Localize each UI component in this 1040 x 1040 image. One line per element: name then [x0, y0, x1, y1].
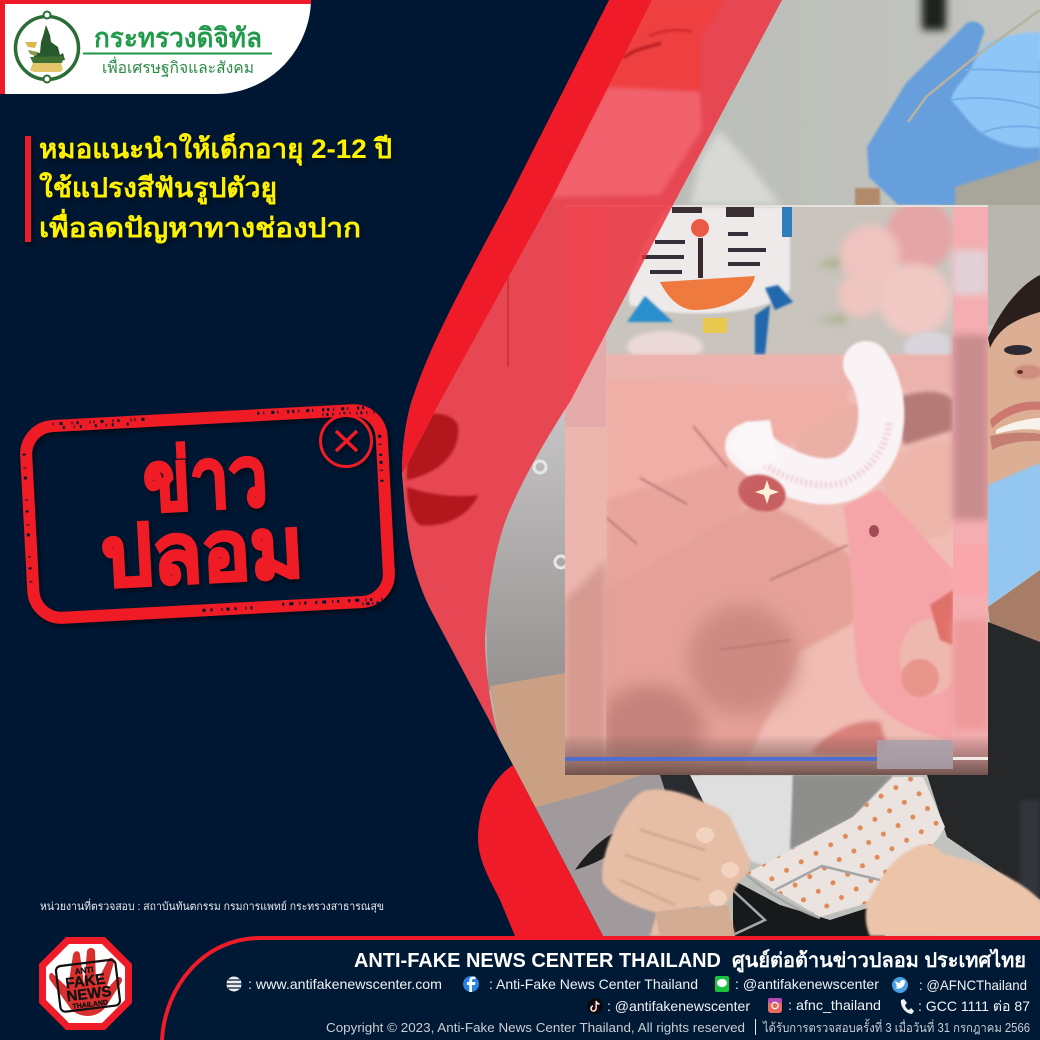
tinted forehead	[608, 0, 724, 90]
icon: ministry emblem	[16, 12, 78, 82]
stamp text: ข่าว	[141, 429, 270, 529]
icon: twitter	[892, 977, 908, 993]
icon: tiktok	[587, 998, 603, 1014]
dark strap	[660, 775, 720, 840]
stamp label: THAILAND	[72, 999, 109, 1011]
background photo: dentist and child	[400, 0, 1040, 940]
icon: phone	[901, 999, 914, 1014]
icon: blue latex glove	[867, 10, 1040, 205]
ministry subtitle: เพื่อเศรษฐกิจและสังคม	[102, 56, 254, 77]
coat of dentist	[480, 400, 640, 700]
hand	[595, 380, 953, 775]
pink handle	[843, 489, 953, 740]
dark fabric	[733, 880, 885, 936]
heading	[25, 131, 392, 244]
left tip of brush head	[742, 419, 775, 466]
stamp label: ANTI	[74, 965, 94, 976]
gray box	[877, 740, 953, 769]
icon: facebook	[463, 976, 479, 992]
tinted face mask	[550, 87, 702, 197]
footer contact row 2: : afnc_thailand	[788, 997, 881, 1013]
coat buttons	[534, 461, 546, 473]
red diagonal band	[402, 0, 652, 474]
glasses wire	[715, 845, 880, 934]
heading: ใช้แปรงสีฟันรูปตัวยู	[39, 172, 277, 205]
red hand	[49, 948, 122, 1016]
right child hand	[866, 845, 1040, 936]
blurred left side strip	[603, 504, 606, 750]
heading accent bar	[25, 136, 31, 242]
video screenshot: U-shaped toothbrush	[565, 201, 988, 775]
polka dot mask	[747, 777, 945, 917]
tinted hair locks	[407, 414, 458, 480]
video bottom shade	[565, 735, 988, 775]
red translucent tint with tinted dentist	[400, 0, 800, 760]
fake news stamp	[23, 407, 390, 621]
footer contact row 1: : Anti-Fake News Center Thailand	[489, 976, 698, 992]
stamp text: ปลอม	[99, 500, 305, 605]
child neck	[988, 570, 1040, 645]
cartoon toy figure	[627, 207, 793, 363]
tinted eye	[624, 43, 661, 58]
white coat shoulder	[690, 130, 780, 205]
icon: line	[715, 976, 729, 992]
flat tone under the tint	[402, 0, 782, 741]
source agency note: หน่วยงานที่ตรวจสอบ : สถาบันทันตกรรม กรมการแพทย์ กระทรวงสาธารณสุข	[40, 898, 384, 913]
child glove on jaw	[988, 463, 1040, 607]
red corner accent	[0, 0, 311, 94]
footer contact row 1	[226, 976, 1027, 993]
footer contact row 2	[587, 997, 1030, 1014]
black sleeve tip	[575, 832, 622, 870]
footer panel with red curved border	[162, 938, 1040, 1040]
progress bar	[565, 757, 877, 761]
copyright line: Copyright © 2023, Anti-Fake News Center Thailand, All rights reserved	[326, 1021, 745, 1035]
icon: globe	[226, 976, 242, 992]
footer contact row 1: : www.antifakenewscenter.com	[248, 976, 442, 992]
lower coat	[510, 770, 700, 940]
footer contact row 2: : @antifakenewscenter	[607, 998, 750, 1014]
white header shape	[0, 0, 311, 94]
back fingers right	[901, 389, 953, 446]
child face	[988, 205, 1040, 490]
right cylinder	[903, 331, 953, 355]
stamp label: NEWS	[66, 983, 112, 1005]
icon: X circle	[320, 416, 372, 466]
icon: instagram	[768, 998, 782, 1013]
red curved blob	[478, 765, 603, 936]
footer contact row 1: : @antifakenewscenter	[735, 976, 879, 992]
footer contact row 2: : GCC 1111 ต่อ 87	[918, 998, 1030, 1014]
stamp text	[95, 427, 305, 605]
stamp label: FAKE	[65, 971, 106, 992]
dark doorway behind glove	[922, 0, 946, 30]
pink flowers	[815, 201, 954, 336]
footer contact row 1: : @AFNCThailand	[919, 977, 1027, 993]
red nail with star	[737, 473, 788, 512]
white toothbrush head	[748, 364, 889, 485]
blurred right side strip	[953, 207, 988, 775]
ministry name: กระทรวงดิจิทัล	[94, 23, 262, 53]
red flower below	[813, 721, 890, 755]
white background below	[683, 775, 800, 868]
skin at wrist	[855, 188, 880, 206]
white top border	[672, 205, 988, 207]
heading: หมอแนะนำให้เด็กอายุ 2-12 ปี	[39, 131, 392, 166]
blurred backdrop	[606, 207, 953, 357]
pink table	[606, 355, 953, 357]
dark clothing	[927, 622, 1040, 900]
copyright line	[326, 1018, 1030, 1035]
logo panel	[0, 0, 311, 94]
left child hand	[602, 789, 750, 936]
tinted coat crease	[507, 273, 509, 367]
footer title: ANTI-FAKE NEWS CENTER THAILAND ศูนย์ต่อต้านข่าวปลอม ประเทศไทย	[354, 948, 1026, 974]
icon: anti fake news octagon	[39, 937, 132, 1030]
heading: เพื่อลดปัญหาทางช่องปาก	[39, 208, 361, 244]
arm of dentist	[490, 660, 640, 808]
stamp label	[55, 959, 121, 1012]
